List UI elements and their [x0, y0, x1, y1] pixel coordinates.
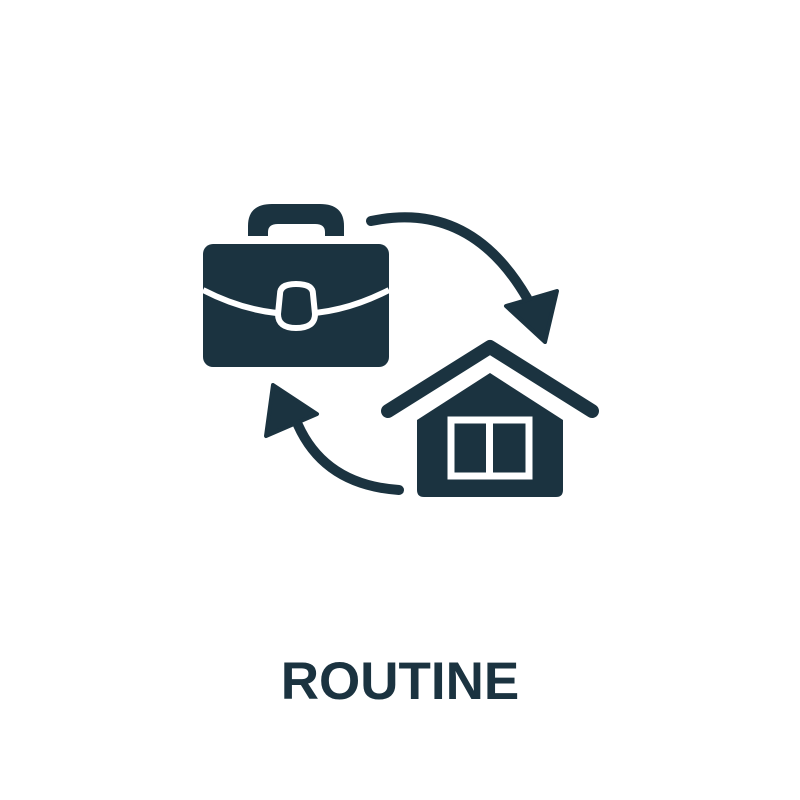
- arrow: top to house: [371, 217, 557, 342]
- icon: house: [388, 347, 592, 497]
- title: ROUTINE: [281, 652, 519, 711]
- icon: briefcase: [203, 204, 389, 367]
- arrow: house to briefcase: [266, 385, 399, 490]
